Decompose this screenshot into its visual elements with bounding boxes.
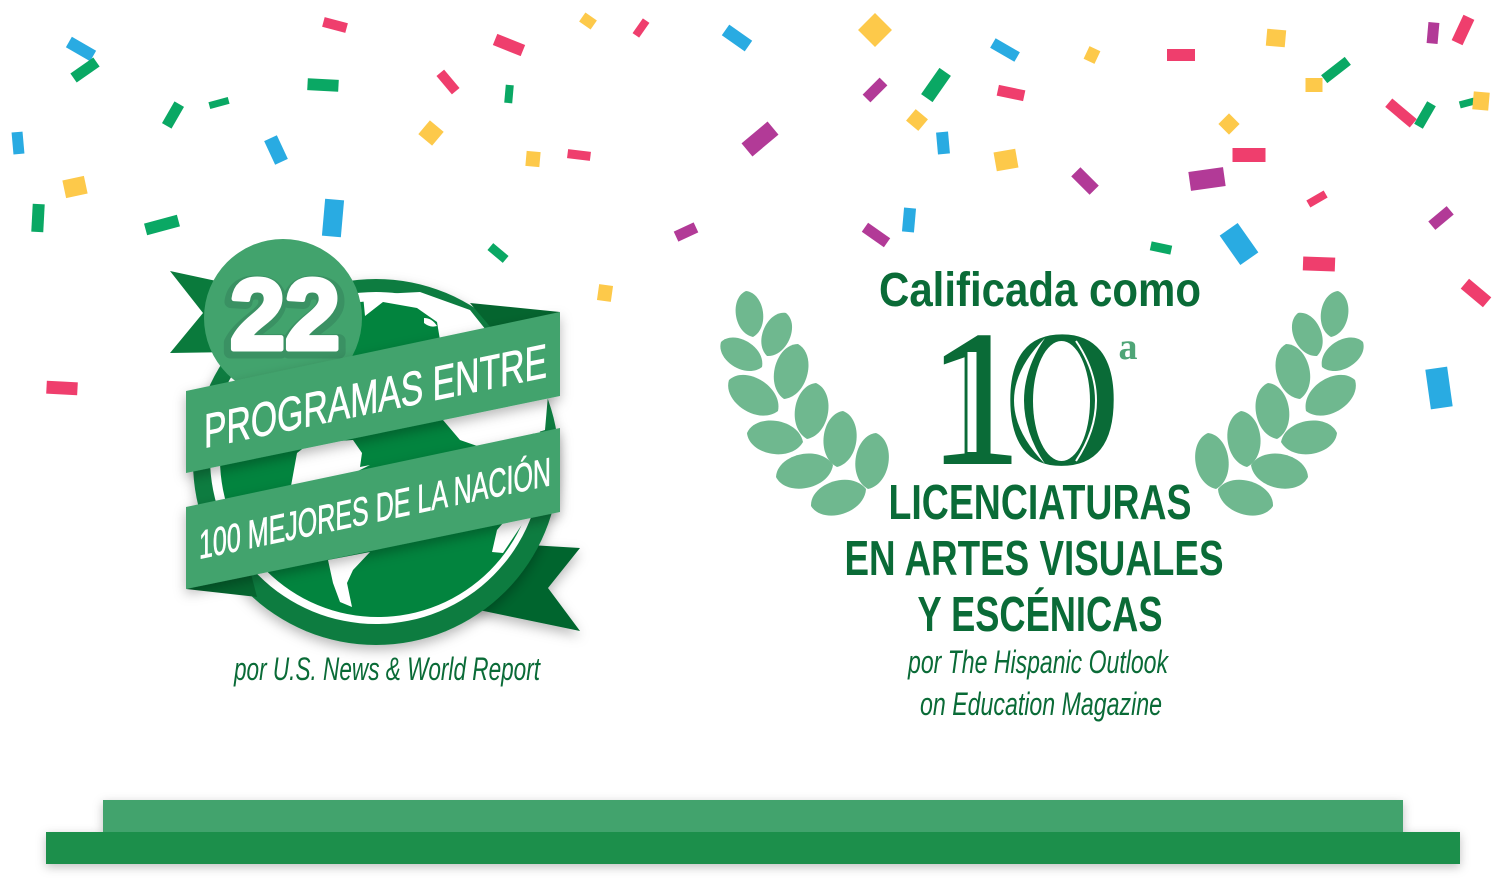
heading: licenciaturas: Y ESCÉNICAS (918, 588, 1162, 642)
continents (291, 292, 548, 607)
wreath: right (1192, 289, 1370, 522)
rank: 10a: a (1118, 326, 1138, 368)
fold: lower left (186, 570, 257, 597)
ribbon: 100 mejores: 100 MEJORES DE LA NACIÓN (199, 448, 551, 568)
rank: 10a: 1 (929, 291, 1021, 507)
wreath: left (714, 289, 892, 522)
ribbon: programas entre (186, 312, 560, 473)
confetti (12, 12, 1491, 409)
caption: Hispanic Outlook: on Education Magazine (920, 686, 1162, 722)
heading: licenciaturas: LICENCIATURAS (888, 476, 1192, 530)
fold: upper right (470, 303, 560, 330)
circle with number 22: 22 (230, 259, 340, 371)
ribbon: 100 mejores (186, 428, 560, 589)
caption: U.S. News: por U.S. News & World Report (233, 651, 541, 687)
globe (193, 279, 559, 645)
heading: calificada como: Calificada como (879, 264, 1201, 317)
ribbon: programas entre: PROGRAMAS ENTRE (204, 334, 547, 459)
tail: upper left (170, 271, 235, 353)
circle with number 22: 22 (227, 262, 343, 374)
podium (46, 800, 1460, 864)
badge: 22 programas (170, 239, 580, 645)
caption: Hispanic Outlook (907, 644, 1169, 722)
rank: 10a: 0 (1001, 291, 1123, 507)
caption: Hispanic Outlook: por The Hispanic Outlook (907, 644, 1169, 680)
tail: lower right (450, 545, 580, 631)
circle with number 22 (204, 239, 362, 397)
heading: licenciaturas (844, 476, 1224, 642)
rank: 10a (929, 291, 1138, 507)
heading: licenciaturas: EN ARTES VISUALES (844, 532, 1224, 586)
